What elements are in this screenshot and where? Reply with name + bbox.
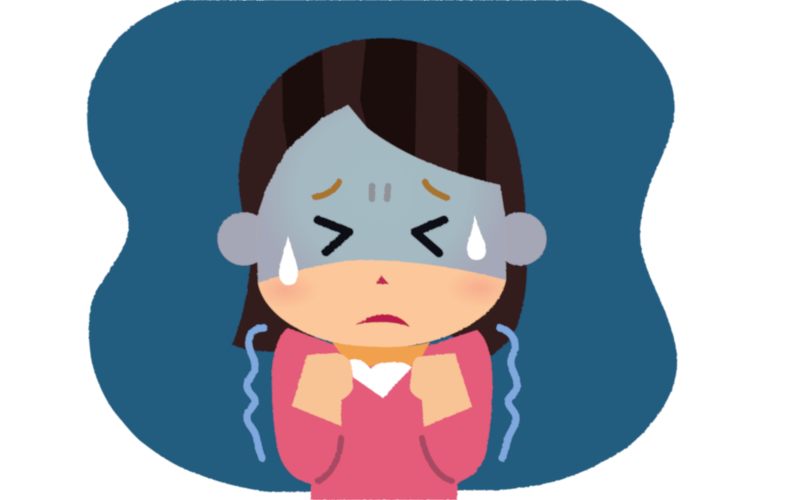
shiver lines: right [500,328,517,458]
ear: left [218,212,270,266]
collar: white heart neckline [350,359,412,398]
eye: left closed [318,220,349,252]
nose [376,275,389,284]
shiver lines: left [247,328,264,458]
cheek blush [262,274,503,304]
collar: neck [332,342,430,366]
eye: right closed [415,220,444,253]
tear: right [467,215,486,260]
ear: right [494,212,546,266]
dark blue background blob [87,0,677,492]
eyebrow: left [315,182,339,197]
hand: left fist [292,353,353,426]
gloomy blue-grey shade on upper face [257,105,506,283]
forehead worry lines [372,186,388,199]
sleeve crease: right [422,438,452,481]
hair [232,38,527,356]
sleeve crease: left [318,438,341,481]
sweater body [272,328,492,500]
hand: right fist [410,353,472,427]
face [257,105,506,348]
illustration: shivering, crying woman [86,0,678,500]
hair stripes [360,38,417,158]
eyebrow: right [425,182,447,198]
tear: left [279,236,298,285]
mouth [355,314,410,327]
